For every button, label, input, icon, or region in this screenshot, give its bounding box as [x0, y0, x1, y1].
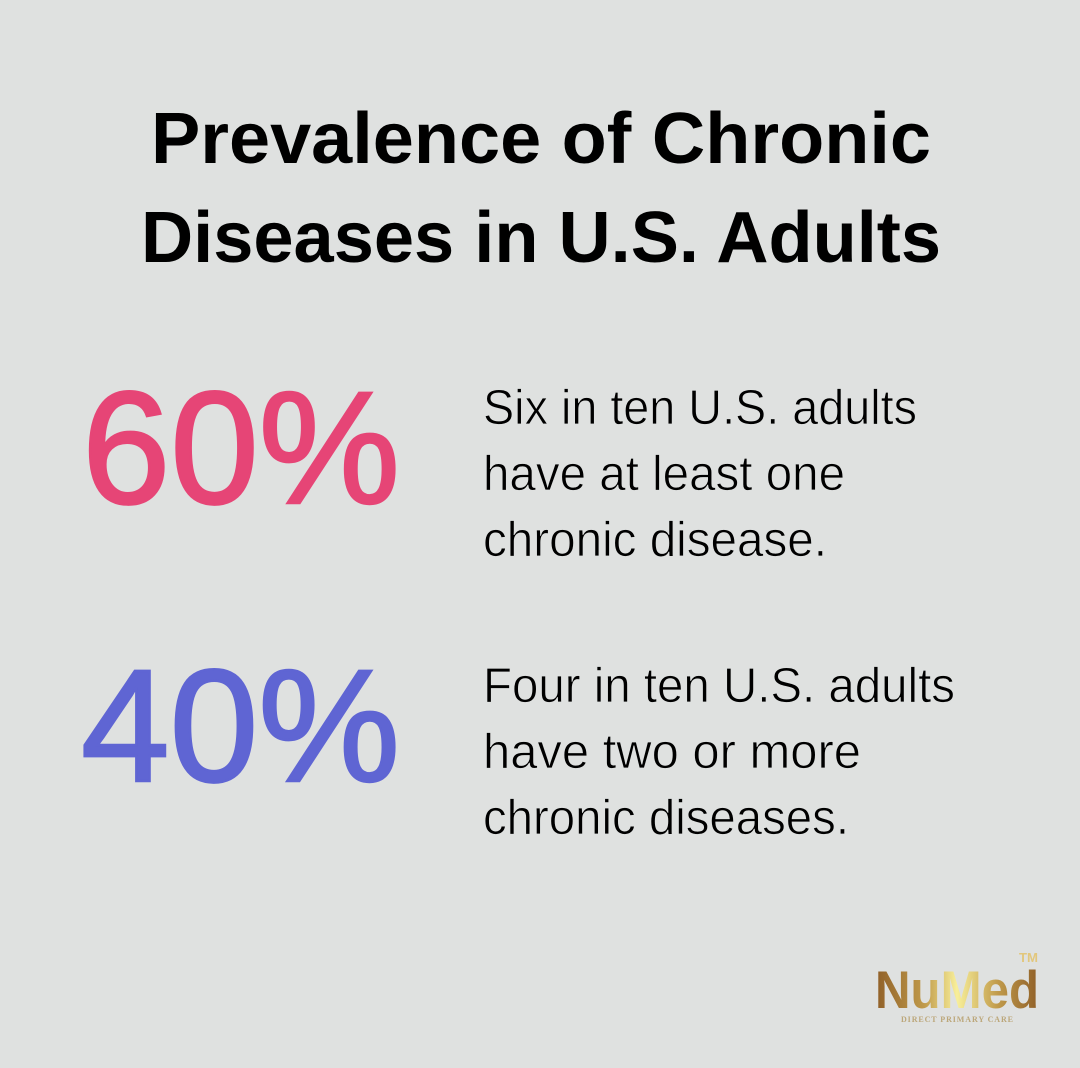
- logo: NuMed: TM: [1019, 950, 1038, 965]
- text block: 60% description: chronic disease.: [483, 513, 827, 567]
- text block: 40% description: Four in ten U.S. adults: [483, 659, 955, 713]
- logo: NuMed: NuMed: [875, 961, 1039, 1020]
- text block: 40% description: chronic diseases.: [483, 791, 849, 845]
- logo: NuMed: DIRECT PRIMARY CARE: [901, 1015, 1013, 1024]
- text block: 60% description: [483, 381, 917, 567]
- stat: 40%: 40%: [81, 636, 400, 815]
- stat: 60%: 60%: [82, 358, 400, 537]
- title: Prevalence of Chronic: [151, 99, 931, 179]
- text block: 60% description: have at least one: [483, 447, 845, 501]
- title: Diseases in U.S. Adults: [141, 198, 941, 278]
- title: [141, 99, 941, 278]
- text block: 40% description: have two or more: [483, 725, 861, 779]
- text block: 60% description: Six in ten U.S. adults: [483, 381, 917, 435]
- text block: 40% description: [483, 659, 955, 845]
